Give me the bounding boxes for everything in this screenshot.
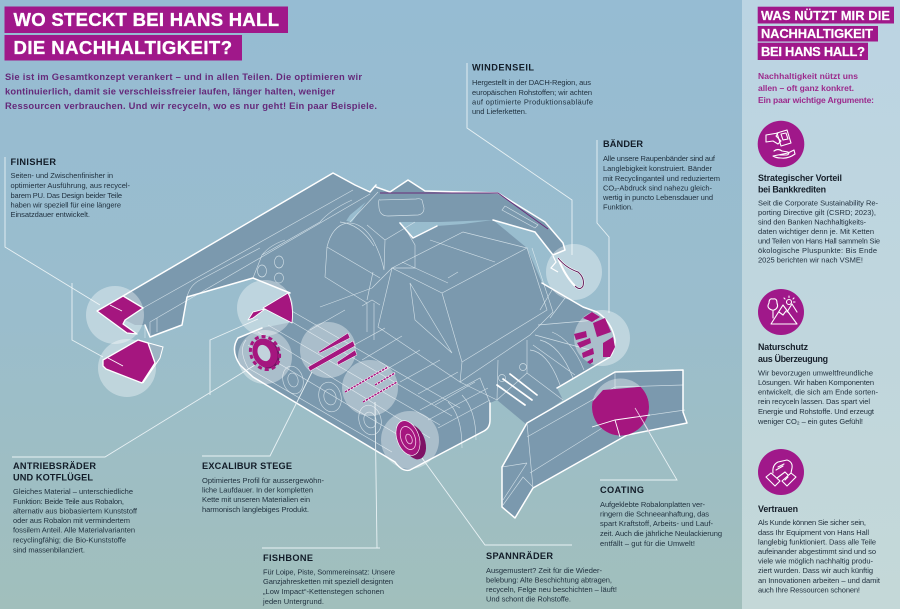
- text: vertrauen: langlebig funktioniert. Dass alle Teile: [758, 538, 876, 546]
- icon: hands with card: [758, 121, 804, 167]
- intro text: kontinuierlich, damit sie verschleissfreier laufen, länger halten, weniger: [5, 86, 335, 96]
- panel: excalibur stege: EXCALIBUR STEGE: [202, 461, 292, 471]
- panel: fishbone: Ganzjahresketten mit speziell designten: [263, 577, 393, 586]
- text: naturschutz: weniger CO₂ – ein gutes Gefühl!: [757, 417, 863, 426]
- sidebar heading: NACHHALTIGKEIT: [761, 26, 873, 41]
- part: excalibur bars: [308, 333, 357, 371]
- panel: baender: Langlebigkeit konstruiert. Bänder: [603, 164, 712, 173]
- panel: coating: Aufgeklebte Robalonplatten ver-: [600, 500, 706, 509]
- part: upper finisher: [97, 296, 143, 334]
- text: strategischer vorteil: 2025 berichten wir nach VSME!: [758, 256, 863, 264]
- panel: baender: Alle unsere Raupenbänder sind auf: [603, 154, 716, 163]
- panel: spannraeder: Ausgemustert? Zeit für die Wieder-: [486, 566, 602, 575]
- panel: baender: wertig in puncto Lebensdauer und: [602, 193, 713, 202]
- panel: antriebsraeder und kotfluegel: UND KOTFLÜGEL: [13, 473, 93, 483]
- text: naturschutz: Naturschutz: [758, 342, 809, 352]
- panel: fishbone: „Low Impact“-Kettenstegen schonen: [263, 587, 384, 596]
- panel: antriebsraeder und kotfluegel: Gleiches Material – unterschiedliche: [13, 487, 133, 496]
- icon: clasped hands: [758, 449, 804, 495]
- text: vertrauen: ziert wurden. Dass wir auch künftig: [758, 566, 873, 575]
- title: [4, 6, 288, 60]
- text: strategischer vorteil: ökologische Pluspunkte: Bis Ende: [758, 246, 877, 255]
- part: fishbone treads: [345, 367, 397, 402]
- sidebar lead text: Nachhaltigkeit nützt uns: [758, 71, 858, 81]
- machine: bold white outline: [123, 173, 687, 518]
- panel: spannraeder: Und schont die Rohstoffe.: [486, 594, 571, 604]
- text: strategischer vorteil: und Teilen von Hans Hall sammeln Sie: [758, 236, 880, 246]
- panel: coating: entfällt – gut für die Umwelt!: [600, 539, 695, 548]
- panel: coating: spart Kraftstoff, Arbeits- und Lauf-: [600, 519, 714, 528]
- panel: windenseil: und Lieferketten.: [472, 107, 527, 116]
- panel: fishbone: jeden Untergrund.: [262, 597, 324, 606]
- machine: purple crane line: [380, 193, 548, 229]
- sidebar panel background: [742, 0, 900, 609]
- sidebar heading: [758, 7, 894, 60]
- panel: antriebsraeder und kotfluegel: oder aus Robalon mit vermindertem: [13, 516, 130, 525]
- panel: baender: BÄNDER: [603, 139, 643, 149]
- text: naturschutz: Lösungen. Wir haben Komponenten: [758, 378, 874, 387]
- panel: antriebsraeder und kotfluegel: recyclingfähig; die Bio-Kunststoffe: [13, 536, 126, 544]
- part: mudguard: [248, 293, 292, 323]
- title: WO STECKT BEI HANS HALL: [14, 9, 279, 30]
- panel: coating: zeit. Auch die jährliche Neulackierung: [600, 529, 722, 538]
- machine: grey silhouette fill: [123, 173, 687, 518]
- panel: antriebsraeder und kotfluegel: alternativ aus biobasiertem Kunststoff: [13, 506, 138, 516]
- intro text: Sie ist im Gesamtkonzept verankert – und in allen Teilen. Die optimieren wir: [5, 71, 362, 82]
- panel: fishbone: [262, 553, 395, 606]
- callout lines: [5, 63, 677, 548]
- sidebar lead text: [758, 71, 874, 105]
- text: strategischer vorteil: sind den Banken Nachhaltigkeits-: [758, 218, 866, 226]
- panel: baender: mit Recyclinganteil und reduziertem: [603, 174, 720, 183]
- sidebar heading: WAS NÜTZT MIR DIE: [761, 8, 890, 23]
- intro text: Ressourcen verbrauchen. Und wir recyceln, wo es nur geht! Ein paar Beispiele.: [5, 100, 377, 111]
- panel: antriebsraeder und kotfluegel: fossilem Anteil. Alle Materialvarianten: [13, 526, 135, 534]
- panel: windenseil: auf optimierte Produktionsabläufe: [472, 98, 593, 106]
- panel: antriebsraeder und kotfluegel: sind massenbilanziert.: [13, 546, 85, 554]
- panel: spannraeder: belebung: Alte Beschichtung abtragen,: [486, 576, 612, 584]
- panel: finisher: Seiten- und Zwischenfinisher in: [10, 171, 113, 180]
- panel: baender: Funktion.: [603, 202, 633, 212]
- panel: finisher: FINISHER: [10, 157, 56, 167]
- part: winch rope hook: [551, 256, 583, 288]
- sidebar heading: BEI HANS HALL?: [761, 44, 865, 59]
- highlight circles: [86, 244, 649, 469]
- text: vertrauen: [758, 504, 881, 594]
- icon: mountains and sun: [758, 289, 804, 335]
- sidebar lead text: Ein paar wichtige Argumente:: [758, 95, 874, 105]
- illustration: snow groomer: [123, 173, 687, 518]
- panel: spannraeder: [486, 551, 617, 604]
- panel: excalibur stege: Optimiertes Profil für aussergewöhn-: [202, 476, 324, 485]
- text: vertrauen: Vertrauen: [758, 504, 798, 514]
- panel: finisher: barem PU. Das Design beider Teile: [10, 191, 122, 200]
- panel: finisher: optimierter Ausführung, aus recycel-: [10, 181, 130, 190]
- part: tensioning wheel: [392, 417, 430, 463]
- panel: spannraeder: recyceln, Felge neu beschichten – läuft!: [486, 585, 617, 594]
- text: strategischer vorteil: daten wichtiger denn je. Mit Ketten: [758, 227, 874, 236]
- panel: antriebsraeder und kotfluegel: Funktion: Beide Teile aus Robalon,: [13, 497, 124, 506]
- panel: excalibur stege: Kette mit unseren Materialien ein: [202, 495, 310, 504]
- panel: windenseil: europäischen Rohstoffen; wir achten: [472, 88, 592, 97]
- part: track bands: [574, 312, 615, 364]
- panel: finisher: haben wir speziell für eine längere: [10, 200, 121, 210]
- text: vertrauen: Als Kunde können Sie sicher sein,: [758, 518, 866, 527]
- text: strategischer vorteil: Seit die Corporate Sustainability Re-: [758, 198, 878, 208]
- panel: finisher: [10, 157, 130, 219]
- text: vertrauen: viele wie möglich nachhaltig produ-: [758, 556, 874, 566]
- part: lower finisher: [103, 340, 163, 383]
- panel: baender: CO₂-Abdruck sind nahezu gleich-: [603, 184, 712, 192]
- panel: antriebsraeder und kotfluegel: ANTRIEBSRÄDER: [13, 461, 96, 471]
- text: vertrauen: auch Ihre Ressourcen schonen!: [758, 586, 860, 594]
- part: blade coating: [592, 386, 650, 438]
- text: naturschutz: entwickelt, die sich am Ende sorten-: [758, 388, 878, 396]
- panel: excalibur stege: [202, 461, 324, 514]
- text: naturschutz: Wir bevorzugen umweltfreundliche: [758, 368, 873, 378]
- text: strategischer vorteil: bei Bankkrediten: [758, 184, 826, 194]
- text: vertrauen: dass Ihr Equipment von Hans Hall: [758, 528, 869, 537]
- panel: fishbone: Für Loipe, Piste, Sommereinsatz: Unsere: [263, 568, 395, 576]
- panel: excalibur stege: harmonisch langlebiges Produkt.: [202, 505, 309, 514]
- panel: finisher: Einsatzdauer entwickelt.: [10, 210, 90, 219]
- panel: windenseil: Hergestellt in der DACH-Region, aus: [472, 78, 591, 87]
- machine: detail lines: [143, 190, 685, 505]
- panel: baender: [602, 139, 720, 212]
- panel: windenseil: [472, 62, 593, 116]
- text: vertrauen: aufeinander abgestimmt sind und so: [758, 547, 876, 556]
- text: strategischer vorteil: porting Directive gilt (CSRD; 2023),: [758, 208, 876, 217]
- title: DIE NACHHALTIGKEIT?: [14, 37, 232, 58]
- text: strategischer vorteil: Strategischer Vorteil: [758, 173, 842, 183]
- intro text: [5, 71, 377, 111]
- panel: coating: ringern die Schneeanhaftung, das: [600, 510, 709, 518]
- panel: excalibur stege: liche Laufdauer. In der kompletten: [202, 486, 313, 494]
- text: naturschutz: aus Überzeugung: [758, 354, 828, 364]
- text: vertrauen: an Innovationen arbeiten – und damit: [758, 576, 881, 585]
- text: strategischer vorteil: [758, 173, 880, 264]
- text: naturschutz: Energie und Rohstoffe. Und erzeugt: [758, 407, 875, 416]
- part: drive sprocket: [245, 332, 285, 374]
- sidebar lead text: allen – oft ganz konkret.: [758, 83, 854, 93]
- panel: coating: COATING: [600, 485, 644, 495]
- panel: antriebsraeder und kotfluegel: [13, 461, 138, 554]
- text: naturschutz: [757, 342, 878, 426]
- panel: windenseil: WINDENSEIL: [472, 62, 534, 72]
- panel: spannraeder: SPANNRÄDER: [486, 551, 553, 561]
- text: naturschutz: rein recyceln lassen. Das spart viel: [758, 397, 870, 406]
- panel: fishbone: FISHBONE: [263, 553, 313, 563]
- panel: coating: [600, 485, 722, 548]
